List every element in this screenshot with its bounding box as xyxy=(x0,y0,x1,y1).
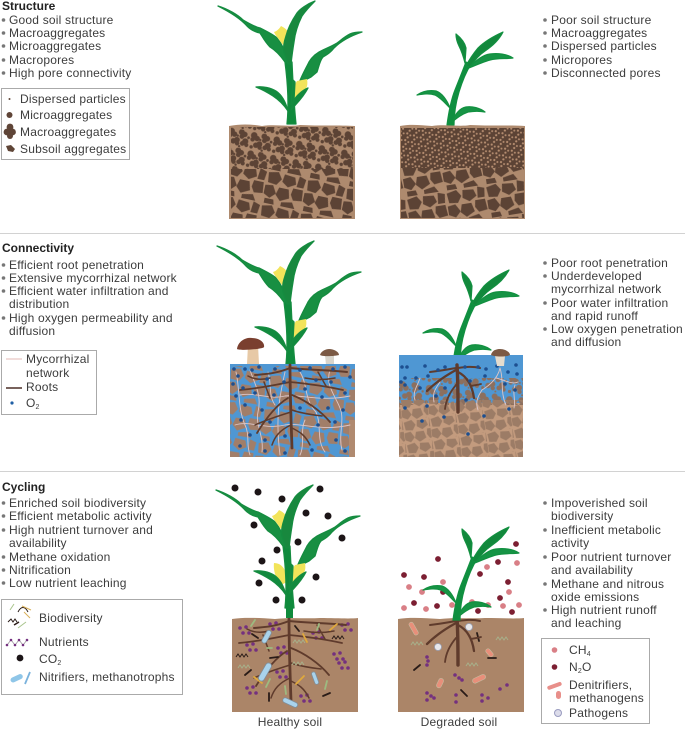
nutrients: healthy xyxy=(238,621,353,703)
legend: cycling degraded: methanogens xyxy=(569,691,644,705)
healthy structure list: Macroaggregates xyxy=(9,26,105,40)
soil: degraded structure xyxy=(400,125,525,219)
degraded connectivity list: Underdeveloped xyxy=(551,269,642,283)
soil: degraded cycling xyxy=(398,618,524,712)
degraded connectivity list: Poor root penetration xyxy=(551,256,668,270)
legend: cycling healthy xyxy=(2,600,182,694)
plant: degraded connectivity xyxy=(423,270,519,363)
healthy connectivity list: diffusion xyxy=(9,324,55,338)
legend: cycling degraded: N xyxy=(569,660,578,674)
oxygen dots: healthy xyxy=(231,365,352,455)
healthy cycling list xyxy=(2,496,153,590)
healthy cycling list: Nitrification xyxy=(9,563,71,577)
degraded cycling list: activity xyxy=(551,536,589,550)
CO2 dots xyxy=(232,484,346,604)
soil: healthy connectivity xyxy=(230,364,355,457)
legend: cycling degraded: 4 xyxy=(587,651,591,658)
legend: cycling healthy: Nitrifiers, methanotrophs xyxy=(39,670,175,684)
panel: cycling xyxy=(2,480,671,729)
legend: connectivity xyxy=(2,350,96,414)
legend: cycling degraded xyxy=(542,638,650,724)
healthy connectivity list xyxy=(2,258,178,338)
legend: connectivity: Mycorrhizal xyxy=(26,352,90,366)
degraded cycling list: oxide emissions xyxy=(551,590,639,604)
degraded cycling list: High nutrient runoff xyxy=(551,603,657,617)
mycorrhizal network: healthy xyxy=(235,370,350,455)
icon: small mushroom xyxy=(320,349,339,365)
oxygen dots: degraded xyxy=(399,363,519,436)
healthy cycling list: Low nutrient leaching xyxy=(9,576,127,590)
legend: soil aggregates: Microaggregates xyxy=(20,108,112,122)
soil: healthy structure xyxy=(229,124,355,219)
degraded connectivity list: mycorrhizal network xyxy=(551,282,662,296)
legend: soil aggregates: Dispersed particles xyxy=(20,92,126,106)
degraded structure list xyxy=(543,13,661,80)
degraded cycling list: Methane and nitrous xyxy=(551,577,664,591)
degraded connectivity list xyxy=(543,256,683,349)
degraded structure list: Micropores xyxy=(551,53,612,67)
degraded connectivity list: and diffusion xyxy=(551,335,621,349)
legend: cycling degraded: 2 xyxy=(578,668,582,675)
legend: cycling healthy: Biodiversity xyxy=(39,611,103,625)
healthy structure list: High pore connectivity xyxy=(9,66,131,80)
legend: connectivity: 2 xyxy=(36,404,40,411)
degraded structure list: Dispersed particles xyxy=(551,39,657,53)
legend: connectivity: network xyxy=(26,366,70,380)
healthy structure list: Macropores xyxy=(9,53,74,67)
nitrifiers: healthy xyxy=(257,629,319,708)
biodiversity: healthy xyxy=(236,620,344,701)
plant: healthy connectivity xyxy=(217,241,361,364)
degraded structure list: Disconnected pores xyxy=(551,66,661,80)
healthy connectivity list: Efficient water infiltration and xyxy=(9,284,169,298)
plant: degraded cycling xyxy=(423,527,519,620)
legend: connectivity: O xyxy=(26,396,36,410)
caption: degraded soil: Degraded soil xyxy=(421,715,497,729)
degraded connectivity list: Poor water infiltration xyxy=(551,296,668,310)
icon: mushroom degraded xyxy=(491,349,510,366)
methane and nitrous oxide dots xyxy=(401,541,522,615)
degraded structure list: Macroaggregates xyxy=(551,26,647,40)
icon: large mushroom xyxy=(237,338,264,364)
degraded cycling list: Impoverished soil xyxy=(551,496,648,510)
heading: cycling: Cycling xyxy=(2,480,45,494)
healthy cycling list: availability xyxy=(9,536,67,550)
legend: cycling degraded: O xyxy=(582,660,592,674)
healthy cycling list: Efficient metabolic activity xyxy=(9,509,152,523)
degraded cycling list: Inefficient metabolic xyxy=(551,523,661,537)
degraded cycling list: biodiversity xyxy=(551,509,613,523)
healthy cycling list: High nutrient turnover and xyxy=(9,523,153,537)
legend: cycling healthy: 2 xyxy=(57,660,62,667)
legend: cycling degraded: Pathogens xyxy=(569,706,628,720)
panel: structure xyxy=(2,0,661,219)
healthy connectivity list: Efficient root penetration xyxy=(9,258,144,272)
plant: degraded structure xyxy=(417,32,513,125)
healthy cycling list: Enriched soil biodiversity xyxy=(9,496,146,510)
degraded cycling list xyxy=(543,496,671,630)
degraded connectivity list: Low oxygen penetration xyxy=(551,322,683,336)
healthy cycling list: Methane oxidation xyxy=(9,550,110,564)
degraded cycling list: and availability xyxy=(551,563,633,577)
legend: soil aggregates: Macroaggregates xyxy=(20,125,116,139)
healthy structure list: Good soil structure xyxy=(9,13,114,27)
healthy connectivity list: High oxygen permeability and xyxy=(9,311,173,325)
legend: cycling healthy: CO xyxy=(39,652,57,666)
healthy connectivity list: distribution xyxy=(9,297,69,311)
legend: cycling healthy: Nutrients xyxy=(39,635,89,649)
degraded connectivity list: and rapid runoff xyxy=(551,309,639,323)
legend: soil aggregates xyxy=(2,88,130,160)
degraded cycling list: and leaching xyxy=(551,616,621,630)
soil: healthy cycling xyxy=(232,618,358,712)
degraded cycling list: Poor nutrient turnover xyxy=(551,550,671,564)
plant: healthy structure xyxy=(218,1,362,124)
nutrients: degraded xyxy=(425,655,509,704)
legend: connectivity: Roots xyxy=(26,380,58,394)
healthy structure list: Microaggregates xyxy=(9,39,101,53)
healthy structure list xyxy=(2,13,131,80)
denitrifiers: degraded xyxy=(408,621,494,689)
biodiversity: degraded xyxy=(411,633,508,696)
legend: cycling degraded: Denitrifiers, xyxy=(569,678,632,692)
degraded structure list: Poor soil structure xyxy=(551,13,652,27)
legend: cycling degraded: CH xyxy=(569,643,587,657)
caption: healthy soil: Healthy soil xyxy=(258,715,322,729)
legend: soil aggregates: Subsoil aggregates xyxy=(20,142,126,156)
plant: healthy cycling xyxy=(216,485,360,618)
soil: degraded connectivity xyxy=(399,355,523,457)
heading: connectivity: Connectivity xyxy=(2,241,74,255)
healthy connectivity list: Extensive mycorrhizal network xyxy=(9,271,178,285)
pathogens: degraded xyxy=(434,624,472,650)
mycorrhizal network: degraded xyxy=(414,368,518,410)
panel: connectivity xyxy=(2,241,683,457)
